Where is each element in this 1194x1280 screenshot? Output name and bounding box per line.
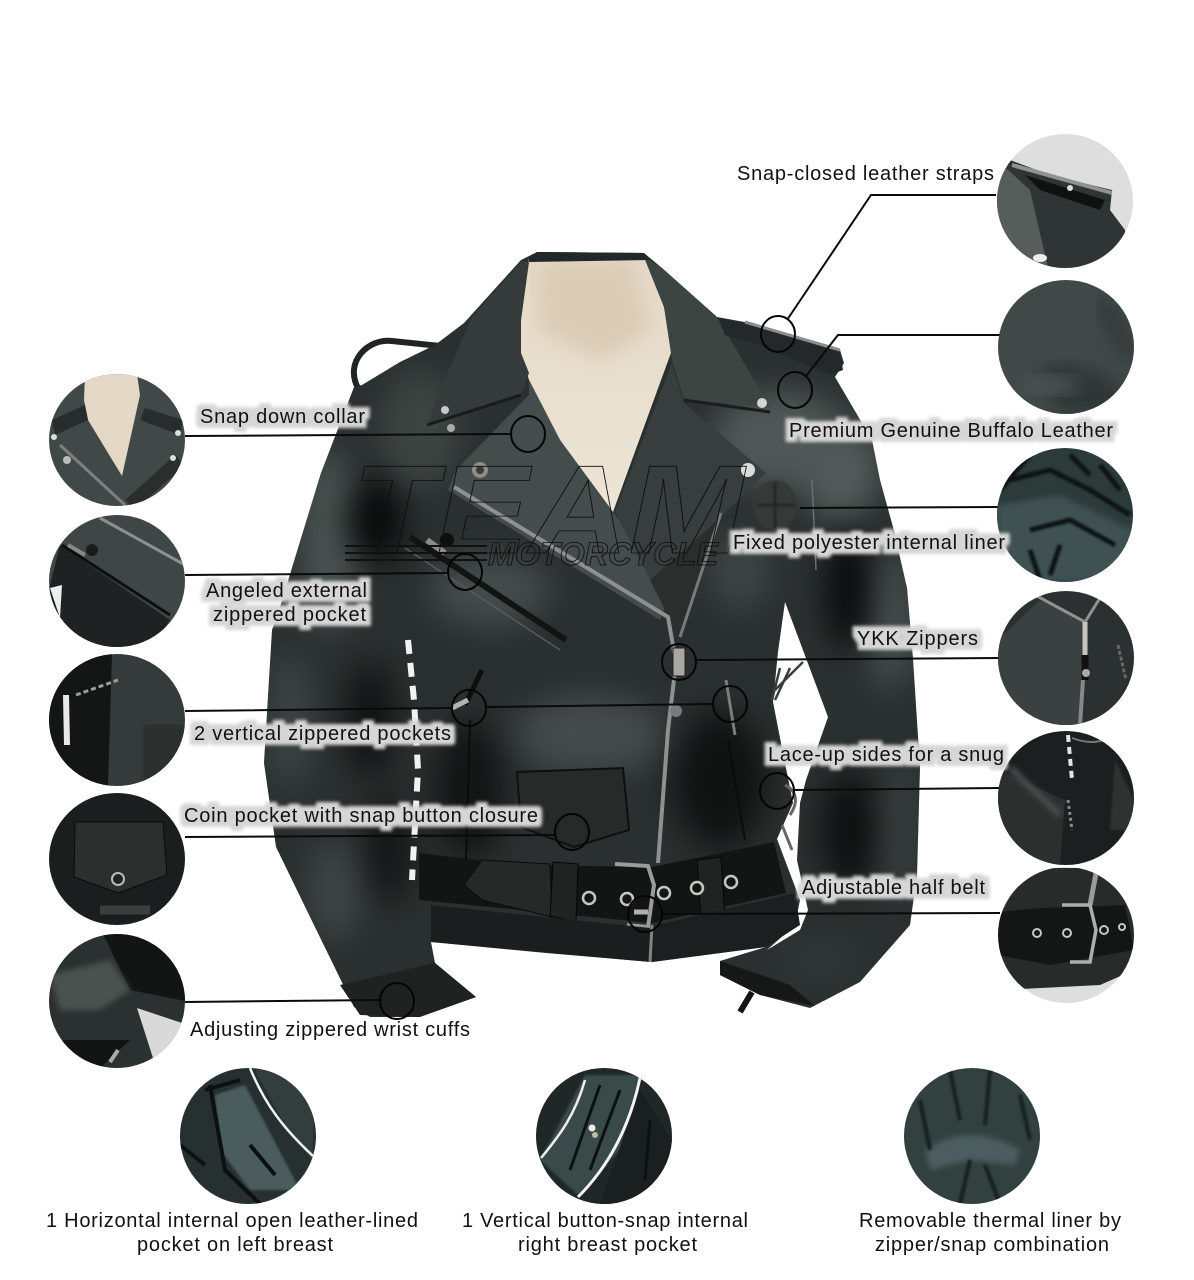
watermark: TEAM MOTORCYCLE: MOTORCYCLE — [488, 536, 720, 572]
jacket silhouette — [250, 240, 940, 1030]
thumbnail: vertical internal pocket — [536, 1068, 672, 1204]
label: snap down collar: Snap down collar — [200, 406, 365, 428]
caption: vertical pocket: 1 Vertical button-snap internal — [462, 1210, 748, 1232]
label: YKK zippers: YKK Zippers — [857, 628, 978, 650]
label: fixed liner: Fixed polyester internal liner — [733, 532, 1005, 554]
patch on chest — [753, 480, 797, 530]
caption: vertical pocket — [462, 1210, 748, 1256]
zippers — [454, 487, 676, 863]
thumbnail: thermal liner — [904, 1068, 1040, 1204]
callout lines and markers — [185, 195, 1000, 1019]
angled zipper pocket — [410, 537, 566, 640]
label: premium leather: Premium Genuine Buffalo Leather — [789, 420, 1113, 442]
watermark: TEAM MOTORCYCLE: TEAM — [352, 439, 747, 580]
coin pocket flap — [517, 768, 629, 847]
thumbnail: leather straps — [997, 134, 1133, 268]
caption: horizontal pocket: 1 Horizontal internal open leather-lined — [46, 1210, 418, 1232]
label: lace-up sides: Lace-up sides for a snug — [768, 744, 1004, 766]
cuff details — [340, 963, 476, 1017]
caption: vertical pocket: right breast pocket — [518, 1234, 697, 1256]
side lacing and gaps — [408, 640, 418, 880]
jacket photo illustration — [250, 240, 940, 1030]
thumbnail: horizontal internal pocket — [180, 1068, 316, 1204]
thumbnail: polyester liner — [997, 448, 1133, 582]
belt and lower hem — [419, 842, 786, 923]
caption: horizontal pocket: pocket on left breast — [137, 1234, 333, 1256]
label: wrist cuffs: Adjusting zippered wrist cuffs — [190, 1019, 470, 1041]
caption: thermal liner — [859, 1210, 1121, 1256]
thumbnail: lace-up sides — [998, 731, 1134, 865]
collars and lapels — [427, 262, 529, 425]
caption: thermal liner: zipper/snap combination — [875, 1234, 1109, 1256]
thumbnail: half belt — [998, 867, 1134, 1003]
thumbnail: buffalo leather — [998, 280, 1134, 414]
shoulder strap — [718, 318, 843, 375]
thumbnail: coin pocket — [49, 793, 185, 925]
thumbnail: angled pocket — [49, 515, 185, 650]
thumbnail: vertical pockets — [49, 654, 185, 786]
mannequin neck — [521, 257, 672, 512]
label: half belt: Adjustable half belt — [802, 877, 985, 899]
label: angled pocket: zippered pocket — [213, 604, 366, 626]
vertical pockets and seams — [465, 670, 482, 705]
label: coin pocket: Coin pocket with snap button closure — [184, 805, 538, 827]
caption: horizontal pocket — [46, 1210, 418, 1256]
thumbnail: snap down collar — [49, 374, 185, 506]
thumbnail: YKK zipper — [998, 591, 1134, 725]
caption: thermal liner: Removable thermal liner by — [859, 1210, 1121, 1232]
label: angled pocket — [206, 580, 367, 626]
label: snap-closed leather straps: Snap-closed leather straps — [737, 163, 994, 185]
label: angled pocket: Angeled external — [206, 580, 367, 602]
thumbnail: wrist cuffs — [49, 934, 185, 1068]
label: vertical pockets: 2 vertical zippered pockets — [194, 723, 451, 745]
